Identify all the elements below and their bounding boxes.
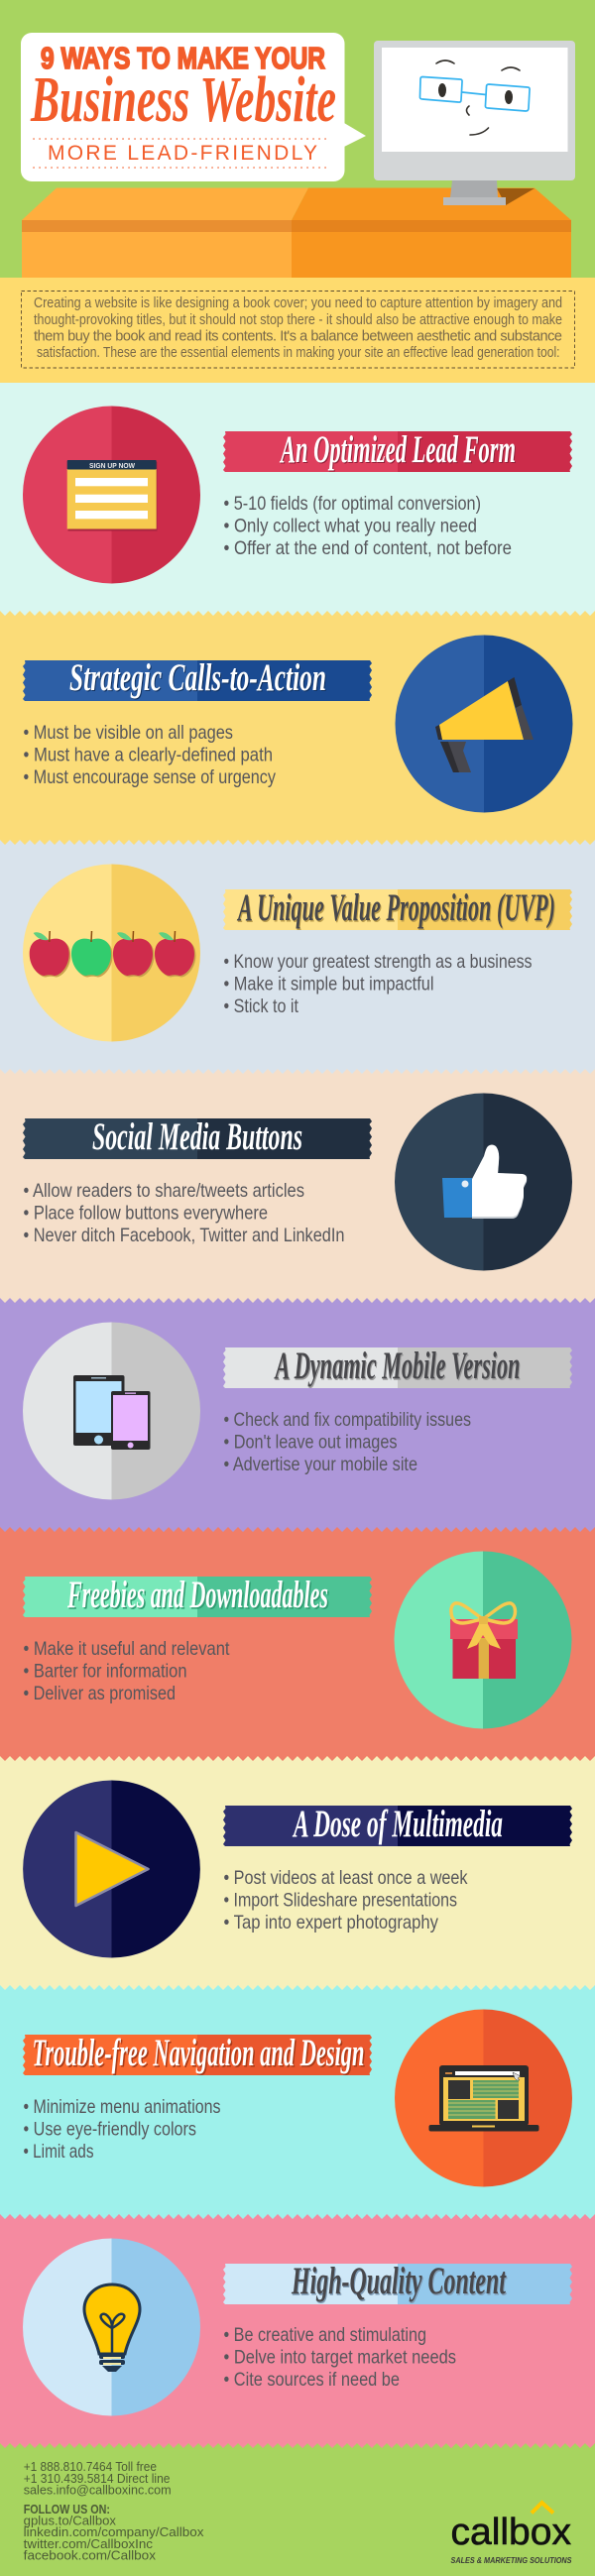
- panel: social media buttons: [0, 1069, 595, 1298]
- title line three: MORE LEAD-FRIENDLY: [48, 142, 317, 165]
- panel: unique value proposition: [0, 840, 595, 1069]
- panel: calls to action: [0, 611, 595, 840]
- social links: linkedin.com/company/Callbox: [24, 2524, 204, 2539]
- bullet list: • Make it simple but impactful: [224, 974, 434, 995]
- icon: play button: [23, 1781, 200, 1957]
- bullet list: • Use eye-friendly colors: [24, 2119, 196, 2141]
- heading banner: Social Media Buttons: [92, 1115, 302, 1158]
- heading banner: [23, 2032, 372, 2076]
- icon: sign up form: SIGN UP NOW: [89, 461, 136, 470]
- bullet list: • Allow readers to share/tweets articles: [24, 1180, 304, 1202]
- heading banner: Freebies and Downloadables: [66, 1574, 328, 1616]
- callbox logo: [450, 2503, 572, 2565]
- bullet list: • Only collect what you really need: [224, 516, 477, 537]
- heading banner: Freebies and Downloadables: [68, 1575, 329, 1618]
- panel: navigation and design: [0, 1985, 595, 2214]
- bullet list: [224, 1409, 471, 1475]
- bullet list: • Never ditch Facebook, Twitter and LinkedIn: [24, 1225, 345, 1246]
- speech bubble title: [21, 33, 366, 181]
- bullet list: • Deliver as promised: [24, 1683, 176, 1704]
- bullet list: [224, 2324, 456, 2391]
- bullet list: • Know your greatest strength as a business: [224, 951, 533, 973]
- icon: gift box: [394, 1551, 571, 1729]
- contact details: +1 888.810.7464 Toll free: [24, 2459, 157, 2474]
- bullet list: • Minimize menu animations: [24, 2096, 221, 2118]
- icon: thumbs up: [395, 1093, 572, 1271]
- bullet list: • Place follow buttons everywhere: [24, 1203, 268, 1225]
- heading banner: Trouble-free Navigation and Design: [32, 2032, 365, 2074]
- bullet list: • Tap into expert photography: [224, 1912, 438, 1933]
- panel: mobile version: [0, 1298, 595, 1527]
- social links: FOLLOW US ON:: [24, 2502, 110, 2517]
- panel: freebies: [0, 1527, 595, 1756]
- heading banner: [23, 656, 372, 701]
- bullet list: • Check and fix compatibility issues: [224, 1409, 471, 1431]
- social links: gplus.to/Callbox: [24, 2514, 117, 2528]
- bullet list: [24, 2096, 221, 2163]
- panel: high-quality content: [0, 2214, 595, 2443]
- callbox logo: callbox: [450, 2512, 571, 2553]
- title line one: 9 WAYS TO MAKE YOUR: [41, 42, 325, 75]
- intro text: [34, 295, 562, 361]
- intro text: them buy the book and read its contents. It's a balance between aesthetic and substance: [34, 329, 562, 345]
- bullet list: • Make it useful and relevant: [24, 1638, 230, 1660]
- bullet list: • Barter for information: [24, 1661, 186, 1683]
- heading banner: Strategic Calls-to-Action: [70, 657, 327, 700]
- bullet list: • Must be visible on all pages: [24, 722, 233, 744]
- bullet list: [224, 951, 533, 1017]
- icon: tablet and phone: [23, 1323, 200, 1499]
- bullet list: • Must have a clearly-defined path: [24, 745, 273, 766]
- icon: laptop: [395, 2009, 572, 2187]
- intro panel: [0, 278, 595, 383]
- monitor with face: [374, 41, 575, 205]
- bullet list: • Offer at the end of content, not before: [224, 537, 512, 559]
- bullet list: [24, 1638, 230, 1704]
- panel: multimedia: [0, 1756, 595, 1985]
- bullet list: • Advertise your mobile site: [224, 1454, 417, 1475]
- bullet list: • Cite sources if need be: [224, 2369, 400, 2391]
- bullet list: • Delve into target market needs: [224, 2347, 456, 2369]
- heading banner: [23, 1115, 372, 1159]
- heading banner: [23, 1574, 372, 1618]
- bullet list: [24, 722, 276, 788]
- social links: [24, 2502, 204, 2563]
- bullet list: • Must encourage sense of urgency: [24, 766, 276, 788]
- footer panel: [0, 2443, 595, 2576]
- social links: facebook.com/Callbox: [24, 2548, 157, 2563]
- icon: megaphone: [395, 635, 573, 813]
- desk: [22, 188, 571, 278]
- icon: sign up form: [23, 407, 200, 583]
- bullet list: • Limit ads: [24, 2141, 94, 2163]
- callbox logo: SALES & MARKETING SOLUTIONS: [450, 2556, 572, 2565]
- contact details: [24, 2459, 172, 2498]
- bullet list: • Import Slideshare presentations: [224, 1890, 457, 1912]
- bullet list: [24, 1180, 345, 1246]
- bullet list: • Be creative and stimulating: [224, 2324, 426, 2346]
- heading banner: Trouble-free Navigation and Design: [34, 2033, 366, 2076]
- social links: twitter.com/CallboxInc: [24, 2536, 154, 2551]
- bullet list: • 5-10 fields (for optimal conversion): [224, 493, 481, 515]
- bullet list: • Post videos at least once a week: [224, 1867, 468, 1889]
- bullet list: • Don't leave out images: [224, 1432, 398, 1454]
- bullet list: [224, 1867, 468, 1933]
- icon: apples: [23, 865, 200, 1041]
- heading banner: Strategic Calls-to-Action: [69, 656, 326, 699]
- bullet list: [224, 493, 512, 559]
- header panel: [0, 0, 595, 278]
- panel: lead form: [0, 383, 595, 611]
- contact details: sales.info@callboxinc.com: [24, 2483, 172, 2498]
- title line two: Business Website: [30, 63, 336, 136]
- bullet list: • Stick to it: [224, 995, 298, 1017]
- contact details: +1 310.439.5814 Direct line: [24, 2471, 171, 2486]
- icon: light bulb: [23, 2239, 200, 2415]
